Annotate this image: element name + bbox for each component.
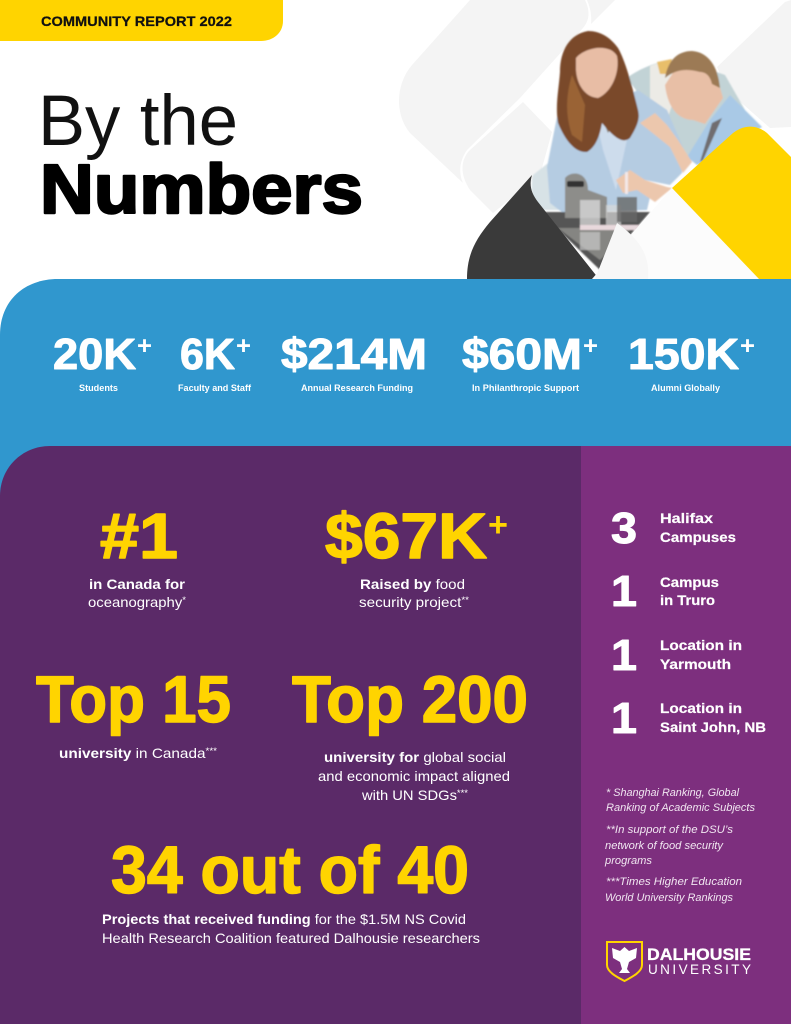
stat: food security fundraising	[325, 500, 508, 610]
stat: food security fundraising: $67K	[325, 500, 487, 572]
location: Saint John	[611, 694, 766, 743]
stat: philanthropic support: $60M	[462, 330, 582, 379]
campus: Halifax	[611, 504, 736, 553]
footnotes: ***Times Higher Education	[606, 876, 742, 888]
stat: number one in oceanography	[88, 500, 187, 610]
stat: top 200 global impact: ***	[457, 788, 469, 798]
stat: number one in oceanography: #1	[100, 500, 178, 572]
stat: students: 20K	[53, 330, 136, 379]
stat: top 15 in Canada: university in Canada	[59, 745, 199, 761]
stat: food security fundraising: Raised by food	[360, 576, 465, 592]
photo: students in a laboratory	[532, 31, 762, 270]
campus: Truro: 1	[611, 567, 637, 616]
location: Saint John: Location in	[660, 700, 742, 716]
panel: headline statistics	[0, 279, 791, 1024]
location: Yarmouth: Location in	[660, 637, 742, 653]
stat: alumni: 150K	[628, 330, 739, 379]
stat: faculty and staff: Faculty and Staff	[178, 383, 252, 393]
stat: food security fundraising: **	[461, 595, 470, 605]
stat: students: +	[137, 332, 152, 360]
footnotes: Ranking of Academic Subjects	[606, 802, 755, 814]
campus: Halifax: Halifax	[660, 510, 713, 526]
stat: food security fundraising: security project	[359, 594, 453, 610]
campus: Halifax: Campuses	[660, 529, 736, 545]
stat: alumni	[628, 330, 755, 393]
stat: philanthropic support: +	[583, 332, 598, 360]
location: Saint John: 1	[611, 694, 637, 743]
stat: faculty and staff	[178, 330, 252, 393]
location: Yarmouth: 1	[611, 631, 637, 680]
Dalhousie University logo	[607, 942, 751, 981]
stat: covid research projects: Projects that received funding for the $1.5M NS Covid	[102, 911, 466, 927]
panel: university rankings	[0, 446, 581, 1024]
stat: research funding: Annual Research Funding	[301, 383, 413, 393]
stat: food security fundraising: +	[488, 506, 508, 544]
stat: faculty and staff: +	[236, 332, 251, 360]
stat: covid research projects	[102, 833, 480, 946]
pale grey shape on white diamond	[595, 223, 648, 279]
title: Numbers	[40, 150, 363, 228]
stat: students: Students	[79, 383, 118, 393]
campus: Truro: Campus	[660, 574, 719, 590]
campus: Halifax: 3	[611, 504, 637, 553]
stat: students	[53, 330, 152, 393]
yellow diamond shape	[672, 127, 791, 279]
stat: top 15 in Canada: ***	[205, 746, 218, 756]
campus: Truro: in Truro	[660, 592, 715, 608]
stat: covid research projects: Health Research Coalition featured Dalhousie researchers	[102, 930, 480, 946]
stat: philanthropic support	[462, 330, 598, 393]
dark diamond shape	[467, 175, 599, 279]
stat: top 15 in Canada: Top 15	[36, 662, 231, 736]
stat: number one in oceanography: oceanography	[88, 594, 177, 610]
footnotes: **In support of the DSU’s	[606, 824, 734, 836]
stat: philanthropic support: In Philanthropic Support	[472, 383, 579, 393]
location: Yarmouth: Yarmouth	[660, 656, 731, 672]
footnotes	[604, 787, 755, 904]
footnotes: network of food security	[605, 840, 725, 852]
decorative header shapes	[399, 0, 791, 213]
stat: top 200 global impact: university for global social	[324, 749, 506, 765]
stat: alumni: Alumni Globally	[651, 383, 720, 393]
white diamond shape	[592, 188, 759, 279]
stat: top 200 global impact: Top 200	[292, 662, 528, 736]
stat: alumni: +	[740, 332, 755, 360]
title	[38, 82, 363, 228]
stat: research funding: $214M	[281, 330, 427, 379]
icon: shield	[607, 942, 642, 981]
panel: campuses and notes	[581, 446, 791, 1024]
footnotes: programs	[604, 855, 652, 867]
stat: top 200 global impact	[292, 662, 528, 803]
location: Yarmouth	[611, 631, 742, 680]
footnotes: World University Rankings	[605, 892, 733, 904]
stat: number one in oceanography: in Canada for	[89, 576, 186, 592]
stat: top 200 global impact: with UN SDGs	[362, 787, 452, 803]
report label: COMMUNITY REPORT 2022	[41, 13, 232, 29]
title: By the	[38, 82, 238, 161]
stat: faculty and staff: 6K	[180, 330, 235, 379]
Dalhousie University logo: UNIVERSITY	[648, 962, 751, 977]
stat: top 200 global impact: and economic impact aligned	[318, 768, 510, 784]
header tab	[0, 0, 283, 41]
location: Saint John: Saint John, NB	[660, 719, 766, 735]
campus: Truro	[611, 567, 719, 616]
stat: number one in oceanography: *	[182, 595, 187, 605]
footnotes: * Shanghai Ranking, Global	[606, 787, 740, 799]
stat: covid research projects: 34 out of 40	[111, 833, 469, 908]
Dalhousie University logo: DALHOUSIE	[647, 945, 751, 964]
